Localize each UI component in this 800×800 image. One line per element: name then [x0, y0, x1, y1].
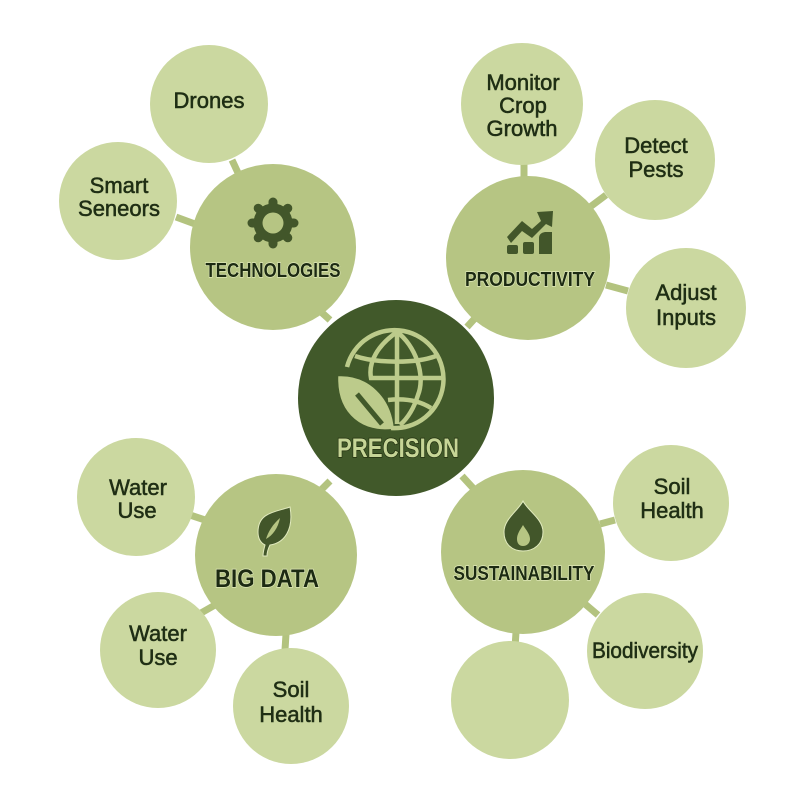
node: monitor crop growth: Growth: [487, 116, 557, 141]
node: soil health lower left: [233, 648, 349, 764]
icon: water drop: [504, 501, 543, 551]
icon: leaf: [258, 507, 291, 556]
node: smart seneors: Seneors: [78, 196, 160, 221]
node: biodiversity: [587, 593, 703, 709]
hub: precision: [298, 300, 494, 496]
node: adjust inputs: [626, 248, 746, 368]
node: water use: Use: [117, 498, 157, 523]
node: adjust inputs: Inputs: [656, 305, 716, 330]
label: technologies: TECHNOLOGIES: [206, 260, 340, 282]
node: water use: [77, 438, 195, 556]
node: soil health right: Health: [640, 498, 704, 523]
node: drones: [150, 45, 268, 163]
node: water use lower: Water: [129, 621, 187, 646]
node: water use lower: Use: [138, 645, 178, 670]
node: monitor crop growth: Monitor: [486, 70, 560, 95]
node: soil health right: Soil: [654, 474, 690, 499]
node: soil health right: [613, 445, 729, 561]
icon: globe with leaf: [339, 330, 445, 429]
icon: gear: [252, 202, 294, 244]
node: smart seneors: Smart: [90, 173, 148, 198]
node: smart seneors: [59, 142, 177, 260]
label: sustainability: SUSTAINABILITY: [454, 563, 595, 585]
label: precision: PRECISION: [337, 433, 459, 463]
node: water use lower: [100, 592, 216, 708]
label: productivity: PRODUCTIVITY: [465, 269, 596, 291]
node: drones: Drones: [174, 88, 244, 113]
panel: technologies: [190, 164, 356, 330]
node: empty: [451, 641, 569, 759]
node: detect pests: [595, 100, 715, 220]
node: detect pests: Detect: [624, 133, 688, 158]
panel: big data: [195, 474, 357, 636]
label: big data: BIG DATA: [215, 565, 319, 593]
node: soil health lower left: Soil: [273, 677, 309, 702]
node: biodiversity: Biodiversity: [592, 638, 698, 663]
panel: productivity: [446, 176, 610, 340]
connector lines: [176, 160, 628, 650]
panel: sustainability: [441, 470, 605, 634]
node: soil health lower left: Health: [259, 702, 323, 727]
node: adjust inputs: Adjust: [655, 280, 717, 305]
node: monitor crop growth: Crop: [499, 93, 547, 118]
icon: growth chart: [507, 211, 553, 254]
node: water use: Water: [109, 475, 167, 500]
node: detect pests: Pests: [628, 157, 684, 182]
node: monitor crop growth: [461, 43, 583, 165]
